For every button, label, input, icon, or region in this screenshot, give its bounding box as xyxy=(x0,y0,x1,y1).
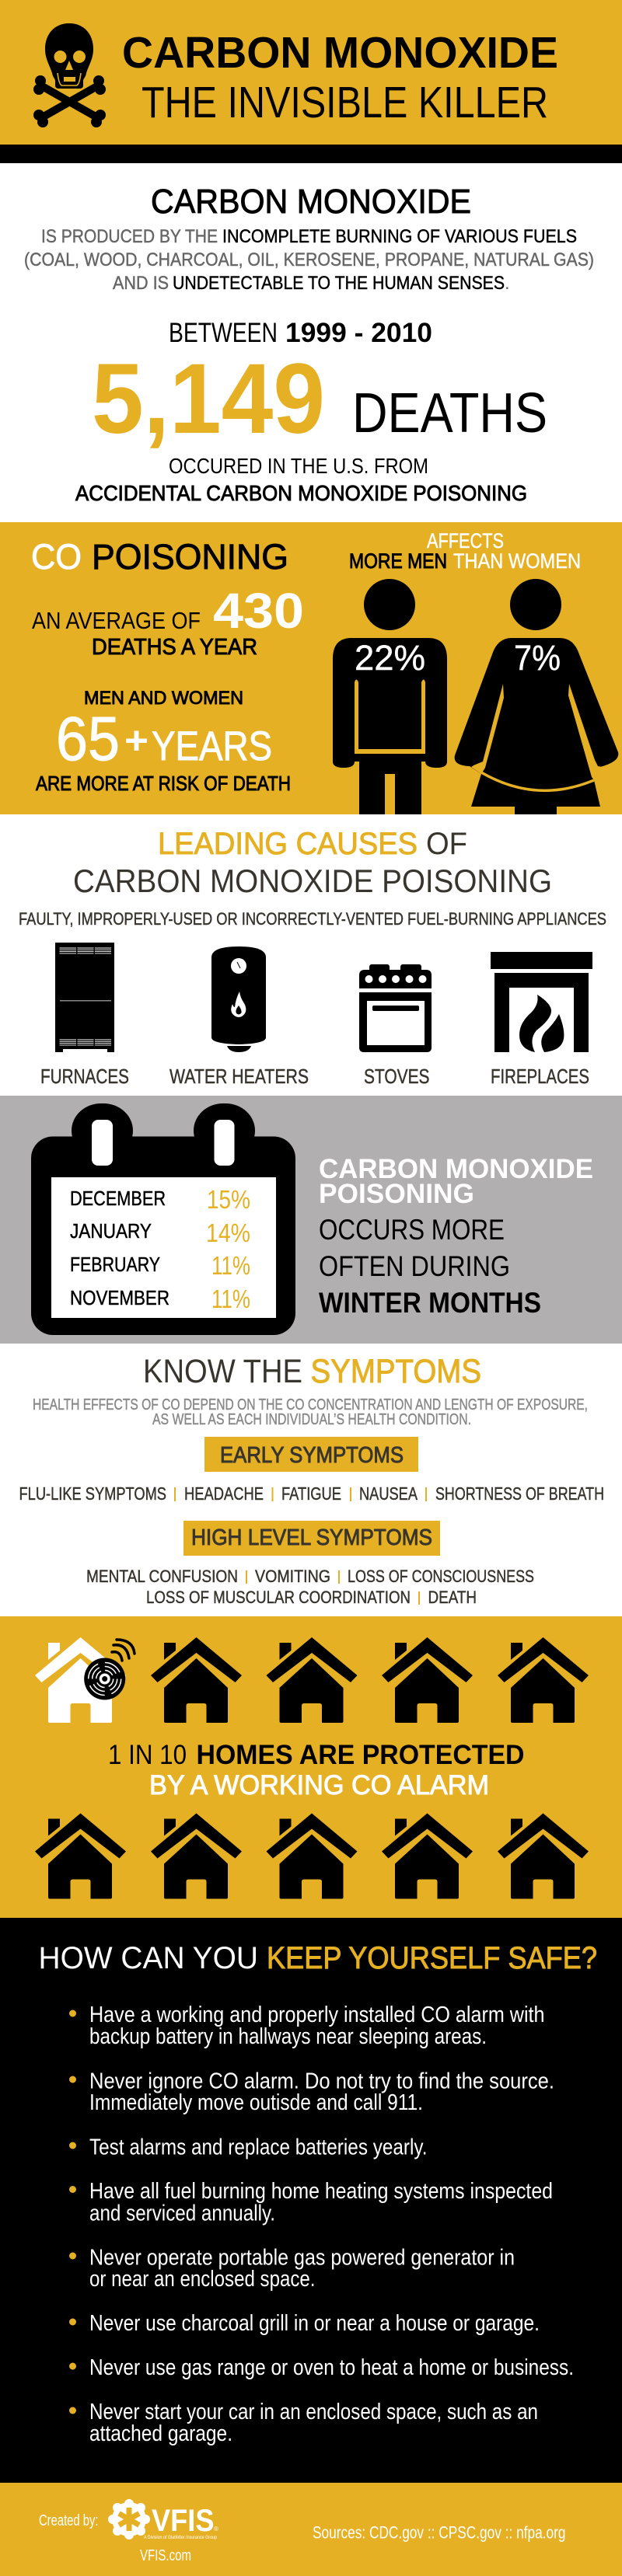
panel: header xyxy=(0,0,622,163)
icon: calendar with monthly percentages: 15% xyxy=(207,1185,250,1214)
icon: stove xyxy=(359,964,432,1052)
heading: CO xyxy=(31,537,82,577)
list: high level symptoms: MENTAL CONFUSION xyxy=(86,1567,238,1586)
icon: house 2 xyxy=(151,1637,242,1723)
icon: calendar with monthly percentages: DECEMBER xyxy=(70,1187,166,1210)
text block: occurred xyxy=(75,454,527,505)
text block: affects more men: MORE MEN xyxy=(349,549,447,573)
text block: 1 in 10 homes: HOMES ARE PROTECTED xyxy=(196,1740,524,1770)
icon: protected house with alarm xyxy=(35,1637,135,1723)
panel: CO alarm homes xyxy=(0,1616,622,1918)
icon: house 10 xyxy=(498,1814,589,1899)
bullet: never ignore alarm: Immediately move outisde and call 911. xyxy=(89,2090,423,2115)
panel: definition xyxy=(24,183,594,505)
icon: woman 7% xyxy=(455,579,618,814)
icon: house 8 xyxy=(266,1814,358,1899)
text block: health effects xyxy=(33,1396,588,1428)
bullet: inspect heating: Have all fuel burning home heating systems inspected xyxy=(89,2179,553,2204)
text block: between years: 1999 - 2010 xyxy=(285,318,432,348)
text block: health effects: AS WELL AS EACH INDIVIDUAL’S HEALTH CONDITION. xyxy=(152,1411,471,1428)
bullet: test alarms: Test alarms and replace batteries yearly. xyxy=(89,2135,428,2160)
panel: CO poisoning xyxy=(0,522,622,814)
panel: winter months xyxy=(0,1096,622,1344)
panel: footer xyxy=(0,2483,622,2576)
icon: calendar with monthly percentages: FEBRUARY xyxy=(70,1253,160,1276)
icon: man 22%: 22% xyxy=(355,638,425,678)
list: high level symptoms: LOSS OF CONSCIOUSNESS xyxy=(348,1567,534,1586)
statistic: 430 deaths a year xyxy=(32,583,304,660)
heading: SYMPTOMS xyxy=(311,1353,481,1390)
label: fireplaces: FIREPLACES xyxy=(491,1065,589,1088)
statistic: 65+ years: 65 xyxy=(56,704,120,773)
bullet: generator: Never operate portable gas powered generator in xyxy=(89,2246,515,2271)
statistic: 430 deaths a year: DEATHS A YEAR xyxy=(92,635,257,660)
label: high level symptoms: HIGH LEVEL SYMPTOMS xyxy=(191,1525,432,1550)
list: high level symptoms xyxy=(86,1567,534,1607)
label: water heaters: WATER HEATERS xyxy=(169,1065,309,1088)
logo: VFIS xyxy=(108,2499,218,2540)
panel: leading causes xyxy=(19,827,606,1088)
heading xyxy=(73,827,552,899)
text block: 1 in 10 homes: 1 IN 10 xyxy=(108,1740,187,1770)
icon: house 3 xyxy=(266,1637,358,1723)
text block: winter months xyxy=(319,1154,593,1319)
icon: calendar with monthly percentages xyxy=(31,1103,295,1335)
statistic: 5,149 deaths: 5,149 xyxy=(92,343,325,455)
heading: HOW CAN YOU xyxy=(39,1941,258,1975)
bullet: inspect heating: and serviced annually. xyxy=(89,2201,275,2226)
statistic: 65+ years xyxy=(36,688,291,795)
logo: VFIS: ® xyxy=(214,2525,218,2532)
heading: CARBON MONOXIDE xyxy=(151,183,471,221)
text block: 1 in 10 homes: BY A WORKING CO ALARM xyxy=(149,1770,489,1800)
heading: OF xyxy=(426,827,467,861)
list: early symptoms: FLU-LIKE SYMPTOMS xyxy=(19,1483,166,1504)
label: stoves: STOVES xyxy=(364,1065,429,1088)
text block: definition: IS PRODUCED BY THE xyxy=(41,226,218,247)
heading: CARBON MONOXIDE POISONING xyxy=(73,863,552,899)
text block: between years xyxy=(169,318,432,348)
icon: house 9 xyxy=(382,1814,473,1899)
icon: house 4 xyxy=(382,1637,473,1723)
icon: house 6 xyxy=(35,1814,126,1899)
statistic: 65+ years: ARE MORE AT RISK OF DEATH xyxy=(36,772,291,795)
list: early symptoms: HEADACHE xyxy=(184,1483,264,1504)
text block: between years: BETWEEN xyxy=(169,318,278,348)
bullet: working alarm xyxy=(69,2003,544,2049)
statistic: 65+ years: MEN AND WOMEN xyxy=(84,688,243,709)
statistic: 65+ years: + xyxy=(124,719,149,762)
icon: calendar with monthly percentages: 14% xyxy=(206,1218,250,1247)
icon: calendar with monthly percentages: 11% xyxy=(211,1251,250,1280)
icon: house 7 xyxy=(151,1814,242,1899)
text block: occurred: OCCURED IN THE U.S. FROM xyxy=(169,454,428,478)
text block: winter months: POISONING xyxy=(319,1179,474,1209)
list: early symptoms: NAUSEA xyxy=(359,1483,418,1504)
label: early symptoms xyxy=(204,1437,418,1472)
label: furnaces: FURNACES xyxy=(40,1065,129,1088)
logo: VFIS: VFIS xyxy=(152,2504,215,2538)
title: CARBON MONOXIDE xyxy=(122,28,558,78)
text block: definition: AND IS xyxy=(113,273,169,294)
text: website: VFIS.com xyxy=(140,2547,191,2564)
icon: man 22% xyxy=(333,579,447,814)
heading: KEEP YOURSELF SAFE? xyxy=(267,1941,597,1975)
icon: house 5 xyxy=(498,1637,589,1723)
text block: winter months: WINTER MONTHS xyxy=(319,1287,541,1319)
icon: water heater xyxy=(211,946,266,1052)
text block: affects more men: AFFECTS xyxy=(427,529,504,552)
icon: calendar with monthly percentages: NOVEMBER xyxy=(70,1286,169,1309)
bullet: generator: or near an enclosed space. xyxy=(89,2267,316,2292)
label: early symptoms: EARLY SYMPTOMS xyxy=(220,1443,404,1468)
heading: POISONING xyxy=(92,537,288,577)
bullet: car in garage xyxy=(69,2400,538,2446)
text block: 1 in 10 homes xyxy=(108,1740,524,1800)
statistic: 65+ years: YEARS xyxy=(152,723,272,769)
bullet: charcoal grill: Never use charcoal grill in or near a house or garage. xyxy=(89,2311,540,2336)
bullet: working alarm: backup battery in hallways near sleeping areas. xyxy=(89,2024,487,2049)
text block: winter months: OCCURS MORE xyxy=(319,1214,505,1246)
icon: woman 7%: 7% xyxy=(514,638,561,678)
list: early symptoms: FATIGUE xyxy=(281,1483,341,1504)
bullet: never ignore alarm xyxy=(69,2069,554,2115)
list: high level symptoms: VOMITING xyxy=(255,1567,330,1586)
bullet: working alarm: Have a working and properly installed CO alarm with xyxy=(89,2003,544,2027)
panel: symptoms xyxy=(19,1353,604,1607)
statistic: 430 deaths a year: AN AVERAGE OF xyxy=(32,607,201,634)
text block: definition: INCOMPLETE BURNING OF VARIOUS FUELS xyxy=(222,226,577,247)
subtitle: THE INVISIBLE KILLER xyxy=(142,78,548,127)
heading: LEADING CAUSES xyxy=(158,827,418,861)
text: created by: Created by: xyxy=(39,2512,98,2529)
bullet: inspect heating xyxy=(69,2179,553,2226)
panel: keep yourself safe xyxy=(0,1918,622,2483)
logo: VFIS: A Division of Glatfelter Insurance Group xyxy=(144,2536,218,2540)
text block: occurred: ACCIDENTAL CARBON MONOXIDE POISONING xyxy=(75,481,527,505)
statistic: 5,149 deaths: DEATHS xyxy=(352,382,547,444)
icon: furnace xyxy=(55,943,114,1052)
list: early symptoms xyxy=(19,1483,604,1504)
text block: affects more men xyxy=(349,529,581,573)
heading xyxy=(39,1941,597,1975)
icon: fireplace xyxy=(491,952,592,1052)
statistic: 430 deaths a year: 430 xyxy=(213,583,304,639)
icon: skull and crossbones xyxy=(33,23,106,127)
bullet: generator xyxy=(69,2246,515,2292)
text block: definition xyxy=(24,226,594,294)
list: high level symptoms: DEATH xyxy=(428,1588,477,1607)
heading xyxy=(143,1353,481,1390)
bullet: car in garage: attached garage. xyxy=(89,2421,232,2446)
text block: winter months: CARBON MONOXIDE xyxy=(319,1154,593,1184)
text block: definition: . xyxy=(505,273,510,294)
icon: calendar with monthly percentages: JANUARY xyxy=(70,1219,152,1243)
icon: calendar with monthly percentages: 11% xyxy=(211,1285,250,1313)
statistic: 5,149 deaths xyxy=(92,343,547,455)
text block: affects more men: THAN WOMEN xyxy=(453,549,581,573)
label: high level symptoms xyxy=(183,1521,440,1556)
list: high level symptoms: LOSS OF MUSCULAR COORDINATION xyxy=(146,1588,411,1607)
heading: KNOW THE xyxy=(143,1353,302,1390)
bullet: car in garage: Never start your car in an enclosed space, such as an xyxy=(89,2400,538,2424)
bullet: never ignore alarm: Never ignore CO alarm. Do not try to find the source. xyxy=(89,2069,554,2093)
text block: winter months: OFTEN DURING xyxy=(319,1250,510,1282)
text block: definition: UNDETECTABLE TO THE HUMAN SENSES xyxy=(173,273,505,294)
